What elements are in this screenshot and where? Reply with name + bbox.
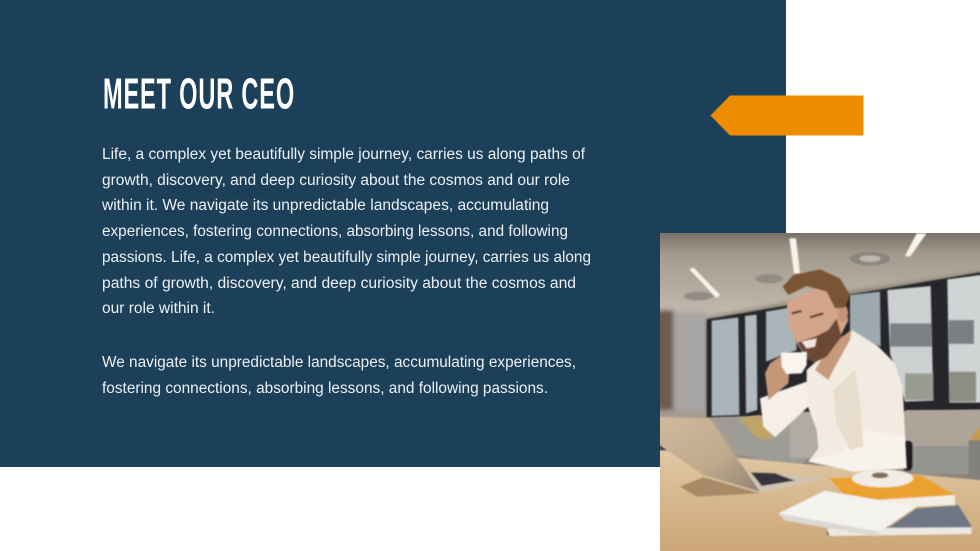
panel: navy background [0,0,786,467]
text block: CEO biography: experiences, fostering connections, absorbing lessons, and following [102,223,568,240]
ear [837,304,848,323]
text block: CEO biography: our role within it. [102,300,215,317]
text block: CEO biography: within it. We navigate its unpredictable landscapes, accumulating [101,197,549,214]
hand [765,355,790,400]
man [760,269,907,472]
text block: CEO biography [101,146,591,397]
arrow: orange pointer [710,96,864,136]
hair [783,269,850,308]
laptop [650,417,827,497]
eyes and brow [792,311,823,317]
text block: CEO biography: We navigate its unpredictable landscapes, accumulating experiences, [102,354,576,371]
cup [781,352,807,374]
text block: CEO biography: growth, discovery, and deep curiosity about the cosmos and our role [102,172,570,189]
text block: CEO biography: Life, a complex yet beautifully simple journey, carries us along paths of [102,146,586,163]
sofas [713,410,980,481]
photo: smiling CEO drinking coffee at a laptop [660,233,980,551]
text block: CEO biography: passions. Life, a complex yet beautifully simple journey, carries us along [102,249,591,266]
beard [797,318,842,363]
neck and face [787,287,848,362]
books and plate [778,469,972,537]
table [650,449,980,551]
text block: CEO biography: paths of growth, discovery, and deep curiosity about the cosmos and [102,275,576,292]
shirt [807,330,907,472]
text block: CEO biography: fostering connections, absorbing lessons, and following passions. [102,380,548,397]
background: ceiling, walls, windows [647,220,980,457]
lights [689,267,720,298]
